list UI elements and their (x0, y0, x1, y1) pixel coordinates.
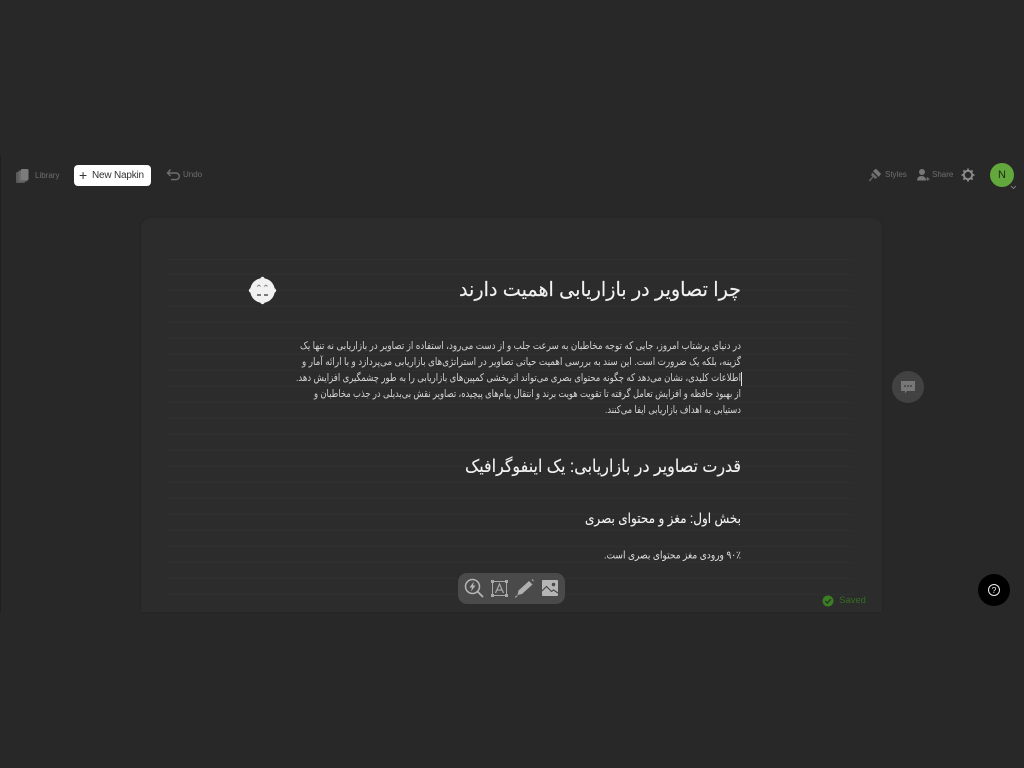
toolbar: share (917, 169, 953, 181)
text block: introduction: در دنیای پرشتاب امروز، جایی که توجه مخاطبان به سرعت جلب و از دست می‌رود، استفاده از تصاویر در بازاریابی نه تنها یک (300, 340, 741, 352)
icon: avatar chevron (1010, 186, 1016, 190)
icon: search spark (464, 578, 484, 598)
toolbar: library: Library (35, 171, 59, 180)
app frame (0, 155, 1024, 612)
text cursor (741, 372, 742, 386)
button: new napkin (74, 165, 151, 186)
toolbar: styles: Styles (885, 170, 907, 179)
button: new napkin: + (79, 167, 87, 183)
icon: text box (491, 580, 508, 597)
floating tools palette (458, 573, 565, 604)
heading: infographic: قدرت تصاویر در بازاریابی: یک اینفوگرافیک (465, 456, 741, 477)
text block: introduction: از بهبود حافظه و افزایش تعامل گرفته تا تقویت هویت برند و انتقال پیام‌های پیچیده، تصاویر نقش بی‌بدیلی در جذب مخاطبان و (313, 387, 741, 400)
text block: introduction (296, 340, 741, 416)
icon: image (542, 580, 558, 596)
floating comment button (892, 371, 924, 403)
toolbar: undo: Undo (183, 170, 202, 179)
avatar: N (998, 169, 1006, 181)
status: saved: Saved (839, 595, 866, 606)
avatar (990, 163, 1014, 187)
help button (978, 574, 1010, 606)
status: saved (822, 595, 866, 606)
icon: question mark (988, 584, 1000, 596)
icon: pencil (515, 579, 534, 598)
icon: spark generate handle (248, 276, 276, 304)
text block: introduction: اطلاعات کلیدی، نشان می‌دهد که چگونه محتوای بصری می‌تواند اثربخشی کمپین‌های بازاریابی را به طور چشمگیری افزایش دهد. (296, 371, 741, 384)
button: new napkin: New Napkin (92, 170, 144, 181)
text block: introduction: گزینه، بلکه یک ضرورت است. این سند به بررسی اهمیت حیاتی تصاویر در استراتژی‌های بازاریابی می‌پردازد و با ارائه آمار و (301, 355, 741, 368)
heading: section one: بخش اول: مغز و محتوای بصری (585, 510, 741, 527)
toolbar: styles (869, 168, 907, 182)
panel: document (141, 218, 882, 612)
toolbar: share: Share (932, 170, 953, 179)
icon: question mark: ? (992, 585, 997, 595)
toolbar: library (16, 169, 60, 183)
icon: settings gear (962, 168, 974, 182)
text block: introduction: دستیابی به اهداف بازاریابی ایفا می‌کنند. (605, 404, 741, 416)
icon: comment bubble (901, 381, 915, 394)
statistic line: ۹۰٪ ورودی مغز محتوای بصری است. (604, 550, 741, 562)
toolbar: undo (166, 169, 202, 180)
title: چرا تصاویر در بازاریابی اهمیت دارند (459, 279, 741, 301)
